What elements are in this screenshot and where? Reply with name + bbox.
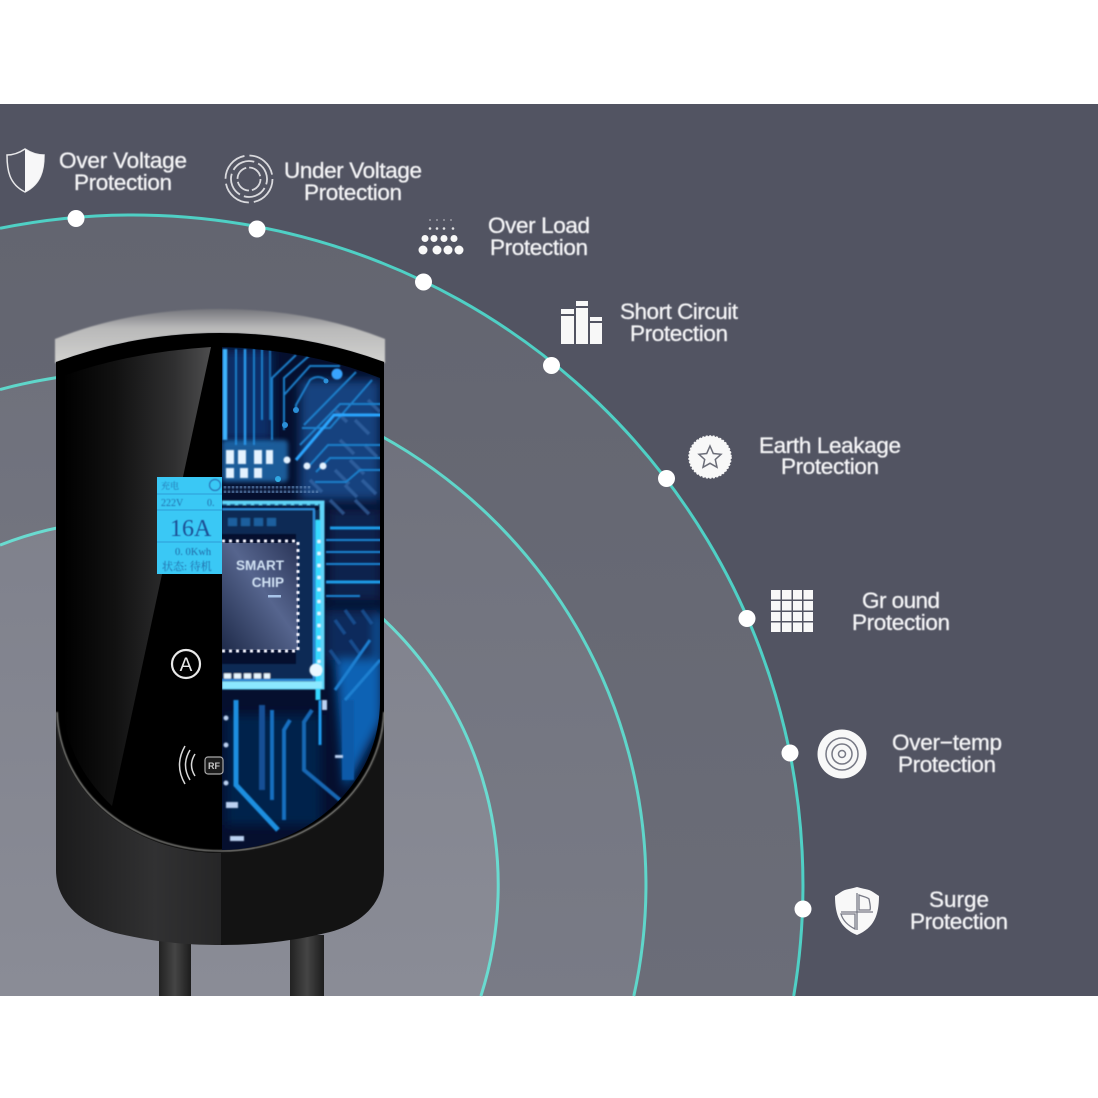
screen rim	[57, 712, 384, 851]
icon: target	[818, 730, 866, 778]
marker dots on outer arc	[68, 210, 812, 918]
LCD display: 222V	[161, 498, 184, 509]
glass sheen	[63, 347, 211, 806]
lower traces	[236, 640, 380, 830]
icon: dot pyramid	[418, 219, 464, 254]
label: Protection	[781, 454, 879, 479]
chip frame	[222, 503, 322, 700]
label: Protection	[304, 180, 402, 205]
label: Earth Leakage	[759, 433, 901, 458]
black upper face	[56, 333, 384, 853]
chip die: SMART	[236, 558, 285, 573]
label: Protection	[630, 321, 728, 346]
label: Over−temp	[892, 730, 1002, 755]
concentric arcs	[0, 215, 803, 996]
label: Over Load	[488, 213, 590, 238]
icon: bars	[561, 301, 602, 344]
right side traces	[326, 528, 381, 596]
label	[759, 433, 901, 479]
item: surge	[835, 887, 1008, 935]
charger device	[55, 309, 385, 996]
item: short circuit	[561, 299, 739, 346]
label: Short Circuit	[620, 299, 739, 324]
label	[892, 730, 1002, 777]
icon: half shield	[7, 149, 44, 192]
charger body	[56, 340, 384, 945]
bright pads	[226, 450, 326, 478]
pin row	[224, 487, 320, 492]
RFID icon: RF	[208, 761, 220, 771]
label	[284, 158, 422, 205]
button icon A	[172, 650, 200, 678]
icon: star badge	[689, 436, 731, 478]
item: over voltage	[7, 148, 187, 195]
top traces	[225, 349, 381, 482]
charging cables	[159, 935, 324, 996]
button icon A: A	[180, 655, 193, 676]
label: Protection	[898, 752, 996, 777]
label	[852, 588, 950, 635]
LCD display: 16A	[170, 516, 212, 542]
LCD display: 充电	[161, 480, 179, 491]
label	[910, 887, 1008, 934]
LCD display	[157, 477, 222, 574]
label: Protection	[74, 170, 172, 195]
item: over load	[418, 213, 590, 260]
diagonal texture	[310, 400, 380, 664]
icon: grid	[771, 590, 813, 632]
chip die: CHIP	[252, 575, 284, 590]
label: Over Voltage	[59, 148, 187, 173]
chip die	[222, 541, 298, 651]
glow behind pads	[222, 440, 288, 482]
label: Protection	[910, 909, 1008, 934]
label	[59, 148, 187, 195]
RFID icon	[180, 746, 223, 784]
icon: quartered shield	[835, 887, 879, 935]
label	[488, 213, 590, 260]
icon: concentric broken rings	[224, 154, 274, 204]
item: under voltage	[224, 154, 422, 205]
item: earth leakage	[689, 433, 901, 479]
label: Under Voltage	[284, 158, 422, 183]
silver top band	[55, 309, 385, 363]
LCD display: 0. 0Kwh	[175, 547, 212, 558]
label: Gr ound	[862, 588, 940, 613]
label: Surge	[929, 887, 989, 912]
LCD display: 0.	[207, 498, 214, 509]
item: over-temp	[818, 730, 1002, 778]
label: Protection	[490, 235, 588, 260]
lower pin row	[224, 700, 320, 708]
lower pads	[224, 700, 343, 841]
item: ground	[771, 588, 950, 635]
label	[620, 299, 739, 346]
board glow patches	[222, 350, 382, 825]
circuit board half	[222, 340, 382, 855]
label: Protection	[852, 610, 950, 635]
LCD display: 状态: 待机	[162, 559, 212, 573]
